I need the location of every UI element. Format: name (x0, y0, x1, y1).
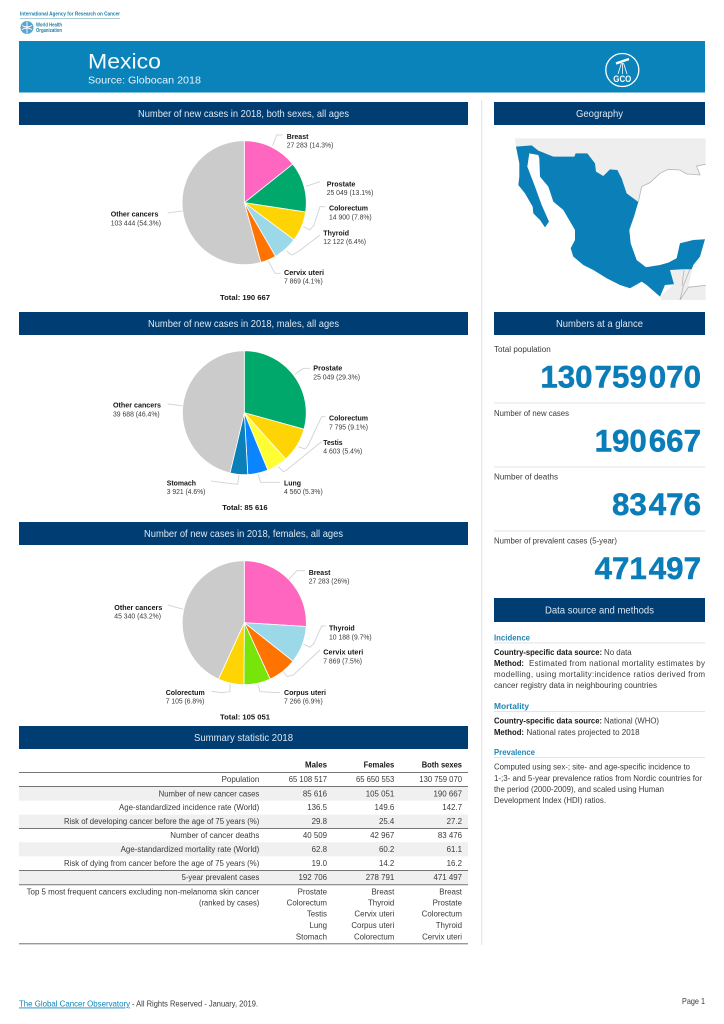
label: Other cancers: 45 340 (43.2%) (114, 612, 161, 621)
label: Prostate: 25 049 (13.1%) (327, 188, 374, 197)
text block: mortality: National (WHO) (604, 717, 659, 726)
label: Cervix uteri (284, 268, 324, 286)
label: Corpus uteri: 7 266 (6.9%) (284, 697, 323, 706)
label: Colorectum (329, 204, 372, 221)
heading: numbers at a glance: Numbers at a glance (556, 319, 643, 330)
row: incidence rate: 149.6 (375, 803, 395, 812)
text block: prevalence: the period (2000-2009), and scaled using Human (494, 785, 664, 794)
row: mortality rate: 61.1 (447, 845, 462, 854)
pie chart: both sexes (111, 132, 374, 302)
table header (305, 760, 463, 769)
stat: total population: 130 759 070 (540, 360, 701, 395)
logo: IARC and WHO: International Agency for Research on Cancer (20, 12, 120, 18)
label: Colorectum: 7 795 (9.1%) (329, 422, 368, 431)
label: Corpus uteri (284, 688, 326, 706)
row: prevalent cases (182, 873, 462, 882)
subtitle: source: Source: Globocan 2018 (88, 76, 201, 86)
logo: IARC and WHO: Organization (36, 28, 62, 34)
stat: deaths: Number of deaths (494, 472, 558, 482)
label: Breast (309, 568, 350, 586)
label: Colorectum (166, 688, 205, 706)
label: Other cancers: Other cancers (114, 603, 162, 612)
row: prevalent cases: 5-year prevalent cases (182, 873, 259, 882)
heading: numbers at a glance (494, 312, 705, 335)
heading: data source and methods (494, 598, 705, 622)
text block: incidence (494, 634, 705, 690)
title: Mexico: Mexico (88, 50, 161, 74)
stat: new cases (494, 409, 705, 467)
text block: prevalence: Development Index (HDI) ratios. (494, 796, 606, 805)
logo: IARC and WHO: World Health (36, 22, 62, 28)
heading: data source and methods: Data source and methods (545, 606, 654, 616)
heading: new cases males (19, 312, 468, 335)
label: Breast: 27 283 (14.3%) (287, 140, 334, 149)
row: new cases: 85 616 (303, 789, 328, 798)
label: Cervix uteri: Cervix uteri (323, 647, 363, 656)
heading: new cases females: Number of new cases in 2018, females, all ages (144, 529, 343, 540)
heading: new cases both sexes: Number of new cases in 2018, both sexes, all ages (138, 109, 349, 120)
stat: prevalent cases: 471 497 (595, 551, 701, 586)
label: Colorectum: 14 900 (7.8%) (329, 212, 372, 221)
label: Thyroid: Thyroid (323, 228, 349, 237)
stat: total population (494, 345, 705, 403)
row: risk of dying: 19.0 (312, 859, 328, 868)
row: top 5 cancers: Top 5 most frequent cancers excluding non-melanoma skin cancer (27, 887, 260, 896)
label: Other cancers (113, 401, 161, 418)
row: top 5 cancers: Breast (439, 887, 463, 896)
row: population (222, 775, 463, 784)
label: Cervix uteri: Cervix uteri (284, 268, 324, 277)
label: Colorectum (329, 414, 368, 431)
row: risk of developing: Risk of developing cancer before the age of 75 years (%) (64, 817, 260, 826)
map: Mexico (515, 138, 706, 300)
label: Stomach: Stomach (167, 478, 196, 487)
label: total: Total: 105 051 (220, 713, 271, 722)
row: top 5 cancers: Prostate (298, 887, 328, 896)
label: Other cancers: 39 688 (46.4%) (113, 409, 160, 418)
text block: incidence: Incidence (494, 634, 531, 643)
row: incidence rate: 142.7 (442, 803, 462, 812)
row: new cases: Number of new cancer cases (159, 789, 259, 798)
label: Thyroid: Thyroid (329, 624, 355, 633)
row: top 5 cancers: Colorectum (287, 899, 327, 908)
label: Stomach (167, 478, 206, 496)
stat: total population: Total population (494, 345, 551, 354)
row: top 5 cancers: Testis (307, 910, 327, 919)
label: Prostate: Prostate (313, 364, 342, 373)
text block: mortality: National rates projected to 2018 (526, 728, 640, 737)
label: Lung (284, 478, 323, 496)
text block: incidence: Country-specific data source: (494, 648, 602, 657)
table header: Females (364, 760, 395, 769)
text block: prevalence: Prevalence (494, 748, 536, 757)
row: incidence rate: Age-standardized incidence rate (World) (119, 803, 260, 812)
row: risk of developing: 25.4 (379, 817, 395, 826)
row: mortality rate (121, 845, 462, 854)
heading: geography: Geography (576, 109, 624, 120)
label: Breast: 27 283 (26%) (309, 577, 350, 586)
row: population: 130 759 070 (419, 775, 463, 784)
label: Cervix uteri: 7 869 (4.1%) (284, 277, 323, 286)
row: incidence rate: 136.5 (307, 803, 328, 812)
label: Other cancers: 103 444 (54.3%) (111, 218, 161, 227)
row: top 5 cancers: Lung (309, 921, 327, 930)
row: risk of developing: 27.2 (447, 817, 462, 826)
logo: IARC and WHO (20, 12, 120, 34)
label: total: Total: 190 667 (220, 293, 270, 302)
text block: mortality: Mortality (494, 702, 530, 711)
row: deaths: 83 476 (438, 831, 463, 840)
label: Cervix uteri: 7 869 (7.5%) (323, 656, 362, 665)
row: prevalent cases: 192 706 (298, 873, 328, 882)
label: Cervix uteri (323, 647, 363, 665)
label: Other cancers (114, 603, 162, 621)
label: total: Total: 85 616 (222, 503, 268, 512)
heading: new cases both sexes (19, 102, 468, 125)
stat: deaths: 83 476 (612, 487, 701, 522)
row: deaths: 42 967 (370, 831, 394, 840)
row: top 5 cancers (27, 887, 463, 941)
pie chart: females (114, 561, 372, 722)
label: Testis (323, 438, 363, 456)
row: risk of dying: 16.2 (447, 859, 462, 868)
text block: incidence: No data (604, 648, 632, 657)
heading: summary statistic (19, 726, 468, 749)
stat: prevalent cases (494, 536, 701, 586)
row: mortality rate: 60.2 (379, 845, 394, 854)
row: top 5 cancers: Thyroid (368, 899, 394, 908)
label: Other cancers: Other cancers (113, 401, 161, 410)
row: top 5 cancers: Stomach (296, 932, 327, 941)
row: top 5 cancers: Colorectum (422, 910, 462, 919)
label: Thyroid (329, 624, 372, 641)
row: top 5 cancers: Prostate (433, 899, 463, 908)
text block: mortality (494, 702, 705, 737)
label: Breast: Breast (309, 568, 331, 577)
row: top 5 cancers: Cervix uteri (422, 932, 462, 941)
label: Colorectum: Colorectum (329, 204, 368, 213)
label: Other cancers (111, 210, 161, 227)
row: new cases (159, 789, 462, 798)
label: Testis: Testis (323, 438, 343, 447)
footer: copyright (19, 998, 258, 1008)
footer: copyright: - All Rights Reserved - January, 2019. (132, 998, 258, 1008)
table header: Both sexes (422, 760, 463, 769)
row: population: 65 108 517 (289, 775, 327, 784)
heading: geography (494, 102, 705, 125)
row: top 5 cancers: Colorectum (354, 932, 395, 941)
row: new cases: 105 051 (366, 789, 394, 798)
row: prevalent cases: 278 791 (366, 873, 394, 882)
row: deaths: 40 509 (303, 831, 328, 840)
row: top 5 cancers: Breast (371, 887, 395, 896)
label: Other cancers: Other cancers (111, 210, 158, 219)
row: top 5 cancers: Cervix uteri (354, 910, 395, 919)
icon: GCO telescope logo: GCO (613, 74, 631, 84)
heading: new cases females (19, 522, 468, 545)
label: Thyroid: 12 122 (6.4%) (323, 237, 366, 246)
row: incidence rate (119, 803, 462, 812)
row: risk of developing (64, 817, 462, 826)
row: risk of dying: Risk of dying from cancer before the age of 75 years (%) (64, 859, 260, 868)
row: top 5 cancers: Thyroid (436, 921, 462, 930)
row: top 5 cancers: (ranked by cases) (199, 899, 260, 908)
row: deaths: Number of cancer deaths (170, 831, 259, 840)
label: Prostate (327, 180, 374, 197)
row: mortality rate: Age-standardized mortality rate (World) (121, 845, 260, 854)
footer: copyright: The Global Cancer Observatory (19, 998, 131, 1008)
heading: new cases males: Number of new cases in 2018, males, all ages (148, 319, 339, 330)
label: Prostate: 25 049 (29.3%) (313, 372, 360, 381)
row: new cases: 190 667 (433, 789, 462, 798)
label: Stomach: 3 921 (4.6%) (167, 487, 206, 496)
footer: page number: Page 1 (682, 996, 705, 1006)
label: Lung: Lung (284, 478, 301, 487)
text block: incidence: Estimated from national mortality estimates by (529, 659, 705, 668)
label: Prostate: Prostate (327, 180, 355, 189)
text block: prevalence: Computed using sex-; site- and age-specific incidence to (494, 763, 691, 772)
label: Testis: 4 603 (5.4%) (323, 447, 363, 456)
row: top 5 cancers: Corpus uteri (351, 921, 395, 930)
icon: GCO telescope logo (606, 54, 639, 86)
table: summary statistics (19, 760, 468, 944)
row: risk of dying: 14.2 (379, 859, 394, 868)
heading: summary statistic: Summary statistic 2018 (194, 733, 293, 744)
row: prevalent cases: 471 497 (433, 873, 462, 882)
text block: prevalence: 1-;3- and 5-year prevalence ratios from Nordic countries for (494, 774, 702, 783)
text block: mortality: Method: (494, 728, 524, 737)
label: Colorectum: 7 105 (6.8%) (166, 697, 205, 706)
stat: deaths (494, 472, 705, 531)
row: risk of developing: 29.8 (312, 817, 328, 826)
row: deaths (170, 831, 463, 840)
text block: incidence: Method: (494, 659, 524, 668)
stat: new cases: 190 667 (595, 424, 701, 459)
label: Breast: Breast (287, 132, 309, 141)
row: mortality rate: 62.8 (312, 845, 328, 854)
text block: mortality: Country-specific data source: (494, 717, 602, 726)
label: Breast (287, 132, 334, 149)
title banner (19, 41, 705, 92)
row: population: Population (222, 775, 259, 784)
stat: new cases: Number of new cases (494, 409, 569, 418)
label: Corpus uteri: Corpus uteri (284, 688, 326, 697)
label: Colorectum: Colorectum (329, 414, 368, 423)
label: Lung: 4 560 (5.3%) (284, 487, 323, 496)
label: Prostate (313, 364, 360, 381)
stat: prevalent cases: Number of prevalent cases (5-year) (494, 536, 617, 546)
text block: incidence: cancer registry data in neighbouring countries (494, 681, 657, 690)
label: Colorectum: Colorectum (166, 688, 205, 697)
row: risk of dying (64, 859, 462, 868)
text block: prevalence (494, 748, 705, 805)
table header: Males (305, 760, 328, 769)
text block: incidence: modelling, using mortality:incidence ratios derived from (494, 670, 705, 679)
label: Thyroid (323, 228, 366, 246)
row: population: 65 650 553 (356, 775, 395, 784)
label: Thyroid: 10 188 (9.7%) (329, 632, 372, 641)
pie chart: males (113, 351, 368, 512)
